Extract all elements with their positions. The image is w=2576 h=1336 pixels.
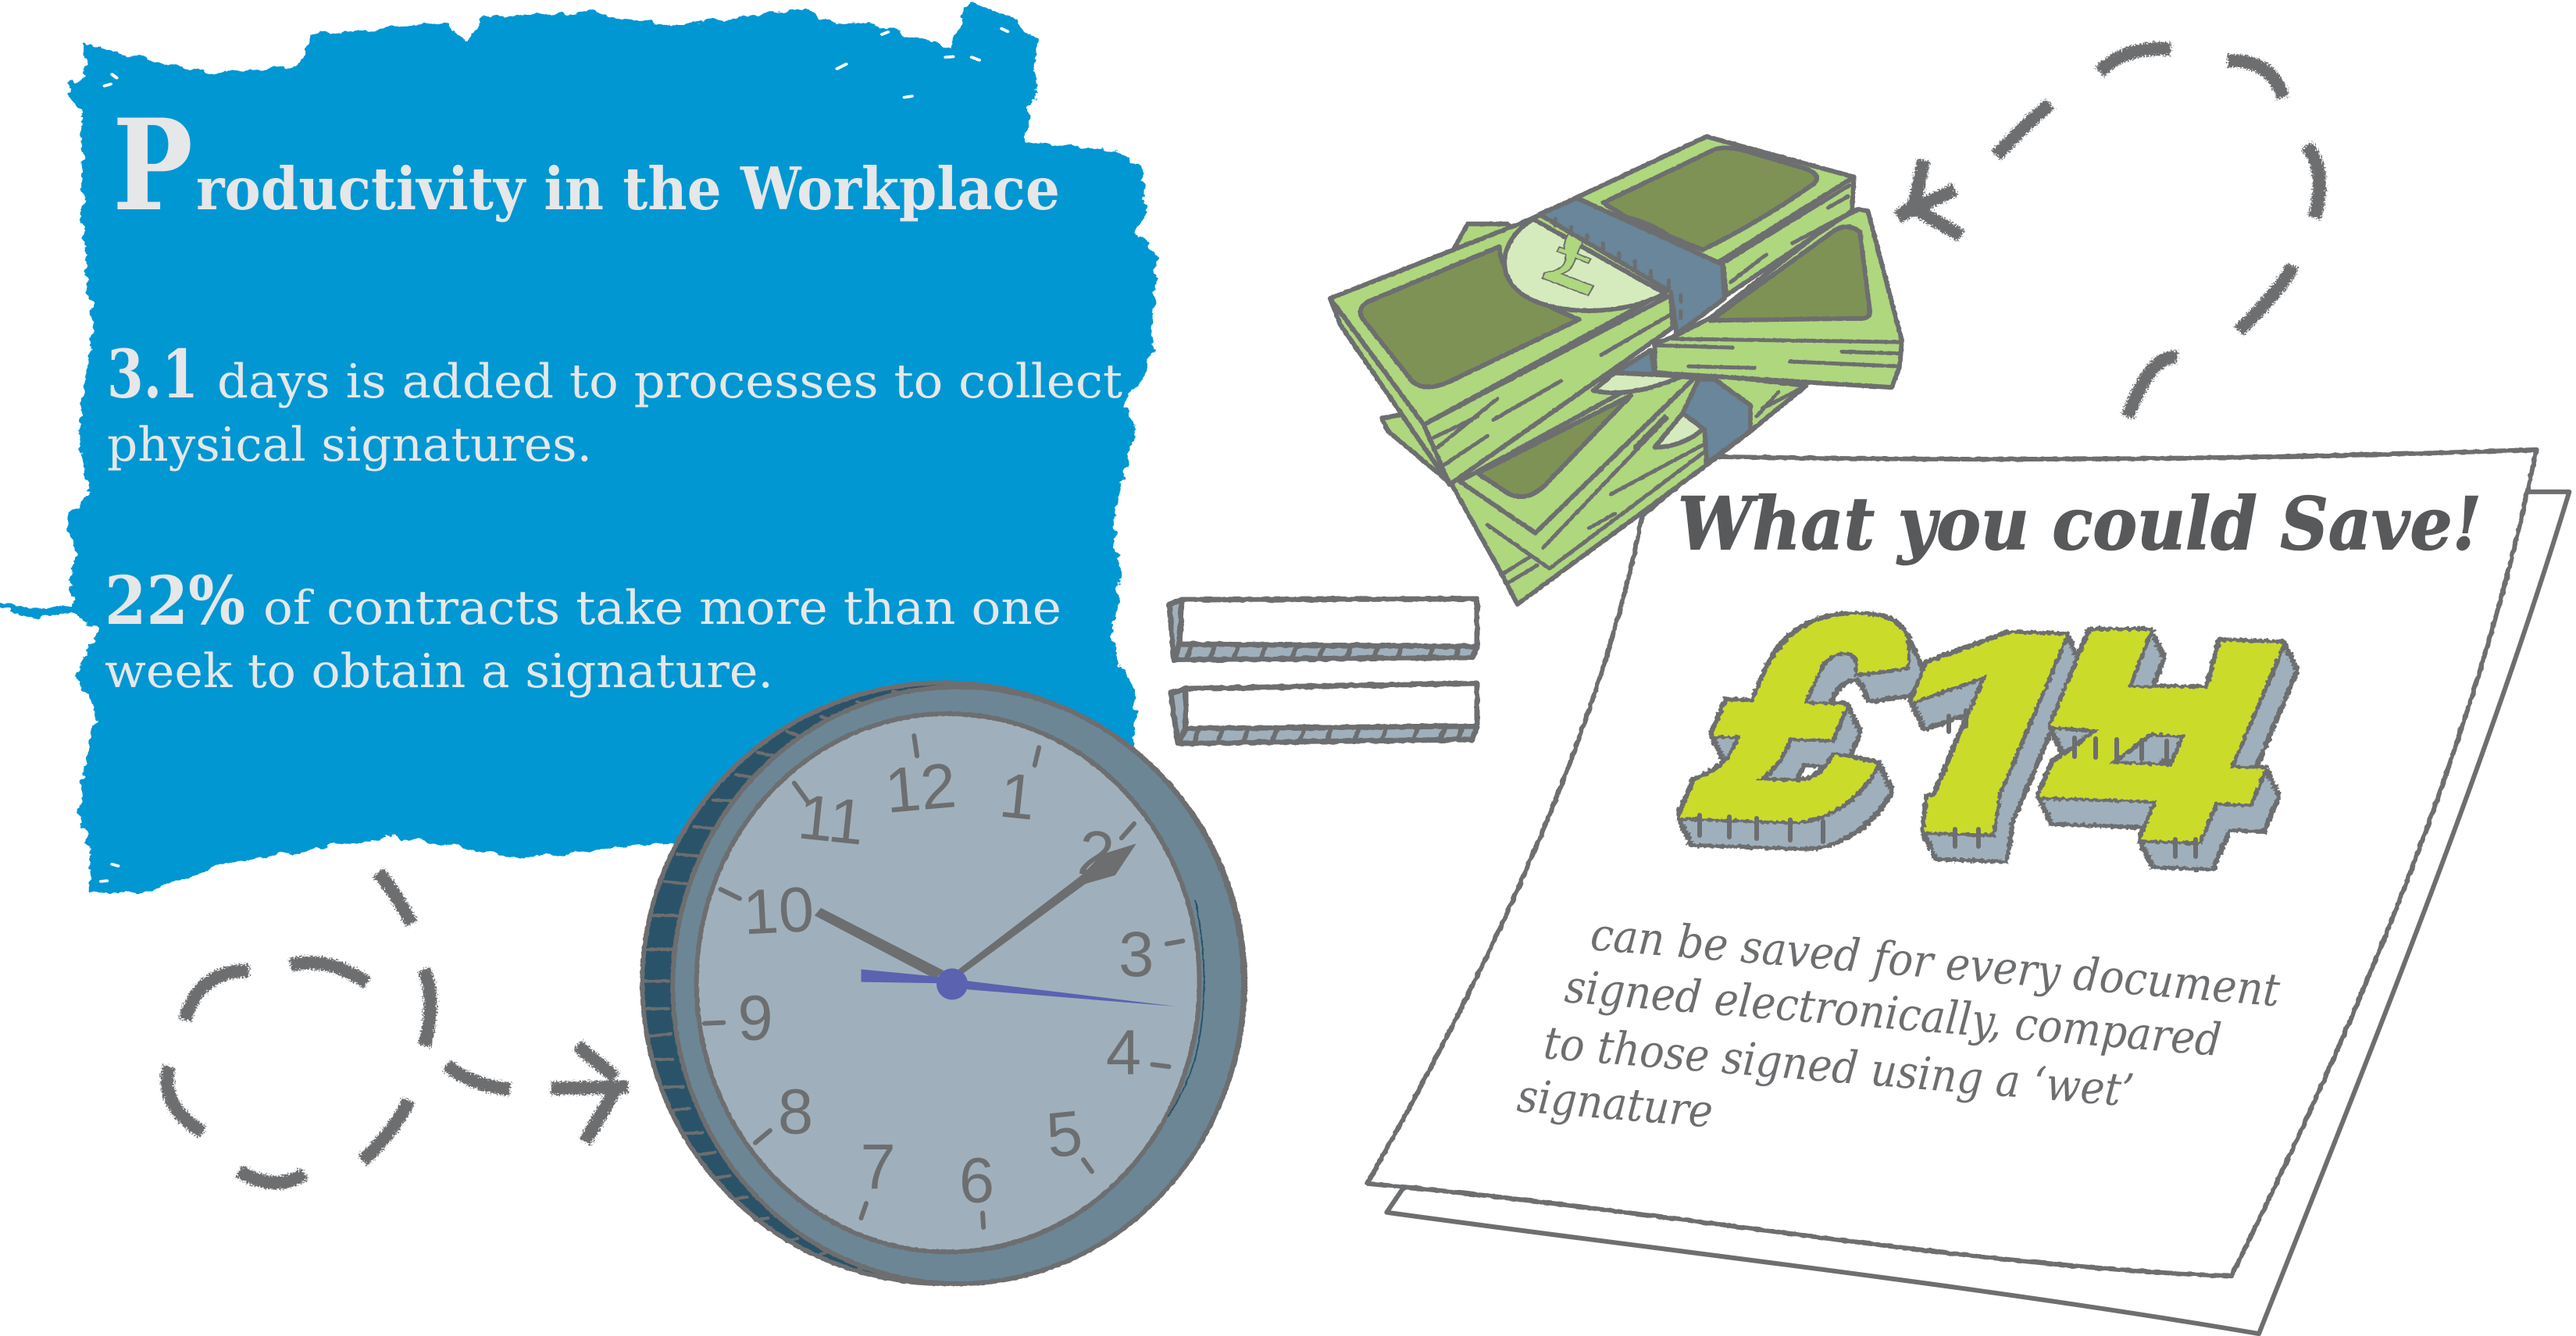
icon: stacks of money [1330,137,1902,604]
text block: 22% of contracts statistic: 22% [105,562,245,640]
clock hands [815,843,1176,1006]
text block: 22% of contracts statistic: week to obtain a signature. [105,644,773,699]
clock numerals: 11 [795,781,868,859]
arrow: dashed loop to money [1898,48,2320,417]
icon: clock [642,682,1245,1284]
text block: savings explanation: can be saved for every document [1589,907,2282,1017]
big number: £14: 4 [1998,580,2342,900]
paper band [1540,198,1725,334]
big number: £14 [1676,611,2299,873]
text block: savings explanation: to those signed using a ‘wet’ [1542,1016,2136,1117]
front sheet [1367,450,2536,1276]
arrowhead [551,1046,628,1142]
back sheet [1386,492,2569,1334]
text block: 22% of contracts statistic [105,562,1061,699]
text block: savings explanation: signature [1515,1069,1715,1138]
clock numerals: 8 [778,1077,813,1148]
clock numerals: 6 [959,1145,994,1216]
clock numerals: 12 [883,750,959,827]
hour tick marks [705,736,1183,1227]
icon: equals sign [1169,599,1477,743]
text block: savings explanation: signed electronically, compared [1563,960,2224,1067]
clock numerals: 3 [1119,919,1154,990]
big number: £14: £ [1658,560,1958,878]
arrow: dashed loop to clock [167,872,628,1183]
text block: 3.1 days statistic: physical signatures. [107,418,592,472]
heading: Productivity in the Workplace: roductivity in the Workplace [196,155,1060,223]
text block: 3.1 days statistic: 3.1 [107,336,198,414]
clock numerals: 1 [997,760,1039,834]
clock body [642,682,1245,1284]
clock numerals: 4 [1106,1017,1141,1088]
text block: savings explanation [1515,907,2282,1138]
clock numerals: 2 [1075,817,1118,891]
clock numerals [737,750,1154,1216]
heading: Productivity in the Workplace: P [112,91,193,239]
text block: 3.1 days statistic [107,336,1122,472]
panel: blue paint background [0,3,1157,892]
heading: What you could Save!: What you could Save! [1678,481,2481,566]
clock numerals: 7 [861,1131,896,1202]
clock numerals: 9 [737,982,773,1053]
clock numerals: 5 [1044,1097,1086,1171]
panel: paper sheets [1367,450,2569,1334]
bottom bundle [1382,350,1806,604]
arrowhead [1898,160,1961,236]
text block: 3.1 days statistic: days is added to processes to collect [217,354,1122,409]
pound symbol on note: £ [1526,198,1636,316]
heading: Productivity in the Workplace [112,91,1060,239]
text block: 22% of contracts statistic: of contracts take more than one [263,581,1061,636]
top bundle [1330,137,1854,484]
right bundle [1655,209,1902,387]
clock numerals: 10 [741,874,815,948]
big number: £14: 1 [1812,573,2157,892]
